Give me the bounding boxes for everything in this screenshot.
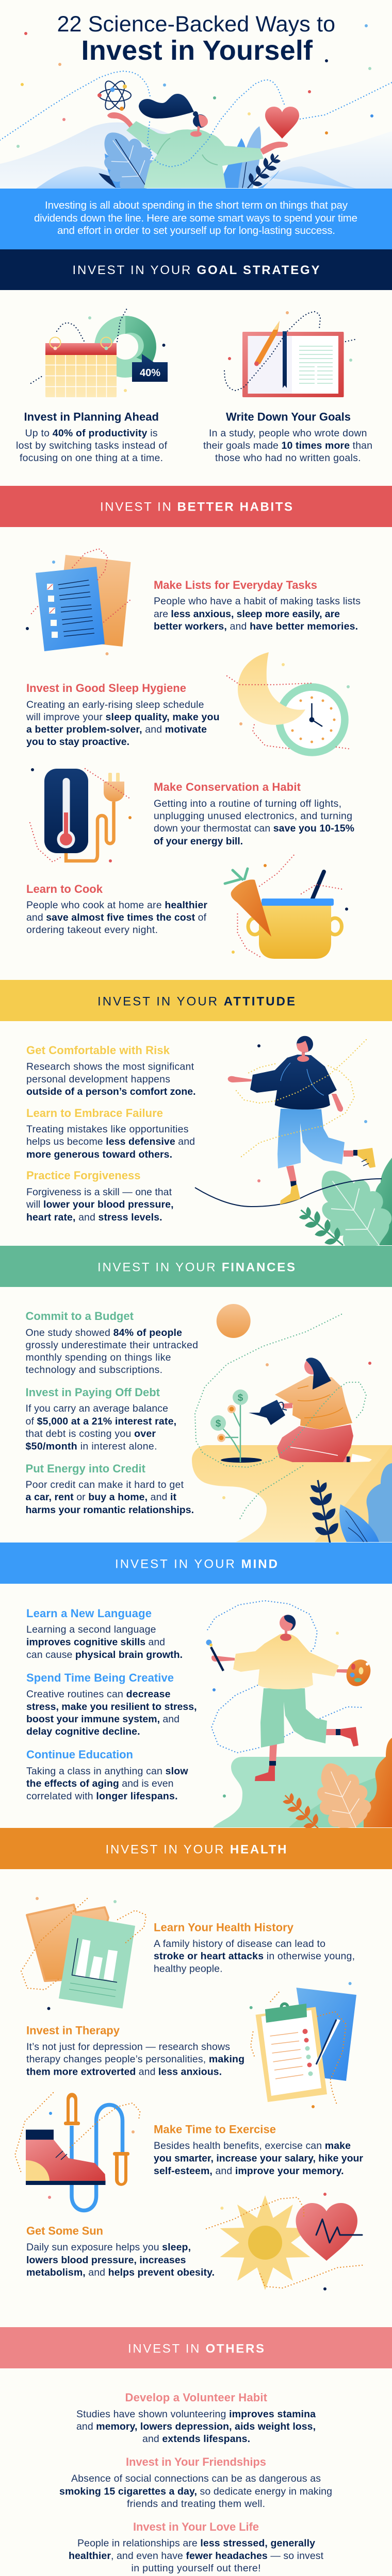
text: write down goals: Write Down Your Goals	[226, 410, 351, 423]
leaves behind figure	[89, 120, 285, 205]
panel: hero illustration	[0, 24, 392, 205]
icon: clipboard	[250, 1982, 356, 2108]
icon: orange orb	[217, 1304, 251, 1338]
text: budget: grossly underestimate their untracked	[26, 1340, 198, 1351]
section heading: better habits: INVEST IN BETTER HABITS	[100, 500, 292, 514]
icon: shoe and jump rope	[15, 2093, 140, 2210]
text: forgiveness	[26, 1169, 173, 1223]
section heading: finances	[0, 1246, 392, 1287]
text: forgiveness: will lower your blood pressure,	[26, 1199, 173, 1210]
section heading: attitude: INVEST IN YOUR ATTITUDE	[97, 994, 295, 1009]
panel: finances	[0, 1246, 392, 1546]
text: embrace failure: helps us become less defensive and	[26, 1136, 195, 1147]
text: credit: Put Energy into Credit	[26, 1462, 146, 1475]
panel: others	[0, 2327, 392, 2576]
text: budget: monthly spending on things like	[26, 1352, 171, 1363]
icon: moon and clock	[227, 652, 351, 752]
text: love life: in putting yourself out there!	[131, 2563, 261, 2574]
text: embrace failure	[26, 1107, 195, 1160]
text: budget: One study showed 84% of people	[26, 1327, 182, 1338]
text: education: Taking a class in anything can slow	[26, 1766, 188, 1777]
icon: sun and heart	[206, 2193, 363, 2291]
text: planning ahead: Invest in Planning Ahead	[24, 410, 159, 423]
text: friendships: smoking 15 cigarettes a day, so dedicate energy in making	[59, 2486, 332, 2497]
text: volunteer: Studies have shown volunteering improves stamina	[76, 2409, 316, 2420]
icon: thermostat and plug	[30, 768, 132, 862]
text: sleep hygiene: Invest in Good Sleep Hygiene	[26, 682, 186, 694]
icon: paint palette	[341, 1655, 375, 1690]
text: make lists	[154, 579, 361, 632]
title: 22 Science-Backed Ways to	[57, 12, 335, 37]
panel: better habits	[0, 486, 392, 959]
section heading: goal strategy: INVEST IN YOUR GOAL STRATEGY	[72, 263, 320, 277]
text: sleep hygiene: Creating an early-rising sleep schedule	[26, 699, 204, 710]
text: paying off debt: If you carry an average balance	[26, 1403, 168, 1414]
text: learn to cook: People who cook at home are healthier	[26, 900, 207, 911]
intro band: dividends down the line. Here are some smart ways to spend your time	[34, 212, 357, 224]
text: language: improves cognitive skills and	[26, 1636, 165, 1648]
text: health history	[154, 1921, 355, 1974]
text: make lists: are less anxious, sleep more easily, are	[154, 608, 340, 620]
text: paying off debt	[26, 1386, 176, 1452]
text: sleep hygiene	[26, 682, 220, 748]
figure: person on tightrope	[195, 1036, 392, 1267]
section heading: better habits	[0, 486, 392, 527]
text: volunteer	[76, 2391, 316, 2445]
text: sun: Get Some Sun	[26, 2225, 103, 2237]
text: health history: Learn Your Health History	[154, 1921, 294, 1934]
icon: to-do lists	[26, 549, 131, 655]
text: language: Learning a second language	[26, 1624, 156, 1635]
text: planning ahead: Up to 40% of productivity is	[25, 428, 158, 439]
illustration: person with paintbrush and palette	[206, 1601, 392, 1841]
text: language: can cause physical brain growth.	[26, 1649, 183, 1660]
text: conservation: down your thermostat can save you 10-15%	[154, 823, 354, 834]
text: embrace failure: Learn to Embrace Failure	[26, 1107, 163, 1120]
text: love life: Invest in Your Love Life	[133, 2520, 259, 2533]
text: embrace failure: Treating mistakes like opportunities	[26, 1124, 189, 1135]
text: make lists: People who have a habit of making tasks lists	[154, 596, 361, 607]
text: love life	[69, 2520, 324, 2574]
text: sun	[26, 2225, 215, 2278]
text: creative: delay cognitive decline.	[26, 1726, 140, 1737]
text: exercise: self-esteem, and improve your memory.	[154, 2165, 344, 2177]
text: conservation	[154, 781, 354, 847]
text: sleep hygiene: a better problem-solver, and motivate	[26, 724, 207, 735]
text: budget	[26, 1310, 198, 1376]
section heading: health: INVEST IN YOUR HEALTH	[105, 1842, 287, 1857]
text: make lists: better workers, and have better memories.	[154, 621, 358, 632]
icon: atom	[97, 78, 131, 112]
text: forgiveness: Forgiveness is a skill — one that	[26, 1187, 172, 1198]
intro band	[0, 189, 392, 249]
hero background hills	[0, 123, 392, 189]
illustration: woman watering money plant	[192, 1314, 392, 1546]
text: conservation: of your energy bill.	[154, 836, 243, 847]
text: credit: harms your romantic relationships.	[26, 1504, 194, 1516]
panel: health	[0, 1828, 392, 2291]
hero confetti dots	[17, 24, 373, 148]
icon: calendar and donut chart	[31, 308, 168, 397]
text: friendships	[59, 2455, 332, 2510]
intro band: Investing is all about spending in the short term on things that pay	[45, 199, 348, 211]
text: education: Continue Education	[26, 1748, 133, 1761]
text: creative	[26, 1671, 197, 1737]
text: planning ahead	[16, 410, 168, 464]
text: volunteer: and memory, lowers depression, aids weight loss,	[76, 2421, 316, 2432]
section heading: health	[0, 1828, 392, 1869]
text: conservation: Make Conservation a Habit	[154, 781, 301, 793]
text: forgiveness: Practice Forgiveness	[26, 1169, 140, 1182]
text: credit: a car, rent or buy a home, and it	[26, 1492, 176, 1503]
text: education: the effects of aging and is even	[26, 1778, 173, 1789]
text: friendships: Absence of social connections can be as dangerous as	[71, 2473, 321, 2484]
section heading: mind	[0, 1543, 392, 1584]
text: health history: A family history of disease can lead to	[154, 1938, 325, 1950]
text: comfortable with risk: Get Comfortable with Risk	[26, 1044, 170, 1057]
text: language: Learn a New Language	[26, 1607, 152, 1620]
text: write down goals: In a study, people who wrote down	[209, 428, 367, 439]
text: comfortable with risk: Research shows the most significant	[26, 1061, 194, 1073]
panel: mind	[0, 1543, 392, 1841]
text: comfortable with risk: outside of a person’s comfort zone.	[26, 1086, 196, 1097]
text: friendships: friends and treating them well.	[127, 2498, 265, 2510]
text: paying off debt: Invest in Paying Off Debt	[26, 1386, 160, 1399]
text: volunteer: Develop a Volunteer Habit	[125, 2391, 268, 2404]
text: exercise	[154, 2123, 363, 2177]
text: creative: Creative routines can decrease	[26, 1689, 171, 1700]
section heading: others: INVEST IN OTHERS	[128, 2342, 264, 2355]
text: learn to cook: and save almost five times the cost of	[26, 912, 207, 923]
text: exercise: you smarter, increase your salary, hike your	[154, 2153, 363, 2164]
text: paying off debt: that debt is costing you over	[26, 1428, 156, 1439]
text: comfortable with risk: personal development happens	[26, 1074, 170, 1085]
rope	[195, 1179, 382, 1207]
money plant	[210, 1389, 262, 1463]
text: creative: boost your immune system, and	[26, 1714, 179, 1725]
text: therapy: therapy changes people’s personalities, making	[26, 2054, 244, 2065]
woman	[249, 1358, 372, 1462]
text: planning ahead: lost by switching tasks instead of	[16, 440, 168, 451]
text: therapy: them more extroverted and less anxious.	[26, 2066, 222, 2077]
text: embrace failure: more generous toward others.	[26, 1149, 172, 1160]
title	[57, 12, 335, 66]
text: conservation: unplugging unused electronics, and turning	[154, 810, 352, 822]
text: volunteer: and extends lifespans.	[142, 2433, 250, 2445]
text: love life: healthier, and even have fewer headaches — so invest	[69, 2550, 324, 2562]
section heading: goal strategy	[0, 249, 392, 290]
text: health history: stroke or heart attacks in otherwise young,	[154, 1951, 355, 1962]
text: sun: Daily sun exposure helps you sleep,	[26, 2242, 191, 2253]
text: comfortable with risk	[26, 1044, 196, 1097]
icon: heart	[265, 107, 299, 139]
intro band: and effort in order to set yourself up for long-lasting success.	[57, 225, 335, 236]
text: sleep hygiene: will improve your sleep quality, make you	[26, 711, 220, 723]
text: write down goals	[203, 410, 372, 464]
title: Invest in Yourself	[81, 35, 313, 66]
callout: 40%: 40%	[140, 367, 160, 379]
text: make lists: Make Lists for Everyday Tasks	[154, 579, 317, 591]
text: credit: Poor credit can make it hard to get	[26, 1479, 184, 1490]
text: education: correlated with longer lifespans.	[26, 1791, 177, 1802]
text: therapy: Invest in Therapy	[26, 2024, 120, 2037]
text: exercise: Besides health benefits, exercise can make	[154, 2140, 351, 2151]
figure: woman holding atom and heart	[107, 94, 288, 188]
money plant: $	[216, 1418, 221, 1429]
text: therapy	[26, 2024, 244, 2077]
text: sleep hygiene: you to stay proactive.	[26, 736, 129, 748]
money plant: $	[238, 1393, 243, 1403]
text: budget: technology and subscriptions.	[26, 1364, 162, 1376]
text: paying off debt: $50/month in interest alone.	[26, 1440, 157, 1452]
orange plants	[277, 1738, 392, 1841]
text: love life: People in relationships are less stressed, generally	[77, 2538, 315, 2549]
dotted trail over figure	[148, 80, 392, 167]
text: sun: metabolism, and helps prevent obesity.	[26, 2267, 215, 2278]
icon: book and pencil	[224, 311, 355, 397]
text: creative: stress, make you resilient to stress,	[26, 1701, 197, 1713]
panel: goal strategy	[0, 249, 392, 464]
text: learn to cook: Learn to Cook	[26, 883, 103, 895]
icon: pot and carrot	[225, 855, 348, 959]
text: budget: Commit to a Budget	[26, 1310, 134, 1323]
text: conservation: Getting into a routine of turning off lights,	[154, 798, 341, 809]
text: paying off debt: of $5,000 at a 21% interest rate,	[26, 1416, 176, 1427]
text: therapy: It’s not just for depression — research shows	[26, 2041, 230, 2053]
text: education	[26, 1748, 188, 1802]
callout: 40%	[132, 354, 168, 382]
text: write down goals: those who had no written goals.	[215, 452, 361, 464]
text: learn to cook	[26, 883, 207, 936]
section heading: mind: INVEST IN YOUR MIND	[115, 1557, 277, 1571]
text: sun: lowers blood pressure, increases	[26, 2255, 186, 2266]
text: credit	[26, 1462, 194, 1516]
blue plants	[304, 1463, 392, 1546]
text: learn to cook: ordering takeout every night.	[26, 924, 158, 936]
icon: medical chart	[21, 1897, 146, 2010]
text: planning ahead: focusing on one thing at a time.	[20, 452, 163, 464]
section heading: finances: INVEST IN YOUR FINANCES	[97, 1260, 295, 1275]
section heading: others	[0, 2327, 392, 2368]
plants	[293, 1154, 392, 1267]
text: friendships: Invest in Your Friendships	[126, 2455, 266, 2468]
section heading: attitude	[0, 980, 392, 1021]
text: write down goals: their goals made 10 times more than	[203, 440, 372, 451]
text: forgiveness: heart rate, and stress levels.	[26, 1212, 162, 1223]
text: language	[26, 1607, 183, 1660]
text: health history: healthy people.	[154, 1963, 223, 1974]
dotted trail	[0, 71, 150, 140]
text: exercise: Make Time to Exercise	[154, 2123, 276, 2136]
text: creative: Spend Time Being Creative	[26, 1671, 174, 1684]
panel: attitude	[0, 980, 392, 1267]
